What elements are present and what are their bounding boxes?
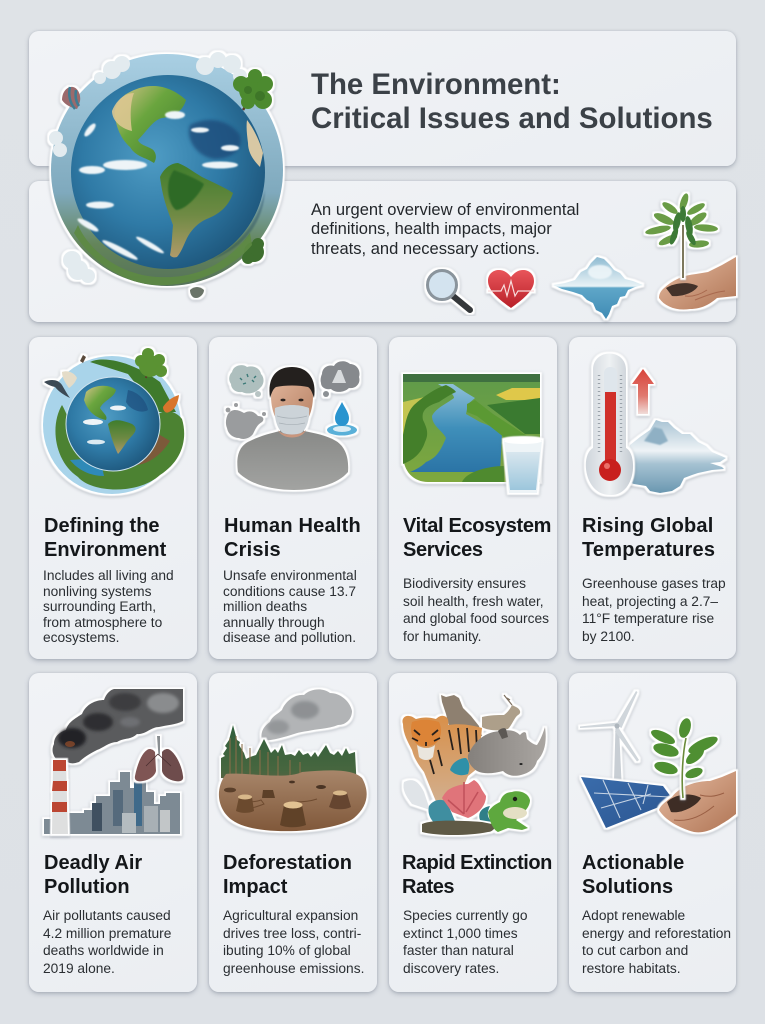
illustration: hero globe	[45, 50, 287, 303]
panel: defining the environment	[29, 337, 197, 659]
heading: Solutions	[582, 876, 673, 898]
heading: Rates	[402, 876, 454, 898]
panel: overview	[29, 181, 736, 322]
illustration: cleared forest	[215, 688, 370, 836]
icon: heart with pulse	[488, 270, 534, 308]
white coral	[403, 780, 430, 810]
heading	[582, 515, 715, 561]
stumps	[224, 781, 351, 827]
rhino	[468, 727, 546, 776]
illustration: smokestack, lungs, city	[40, 688, 187, 840]
body text: Includes all living and	[43, 568, 174, 583]
illustration: masked person	[222, 360, 364, 495]
panel: deforestation impact	[209, 673, 377, 992]
heading: Pollution	[44, 876, 130, 898]
body text: conditions cause 13.7	[223, 584, 356, 598]
heading: Services	[403, 539, 483, 561]
body text: from atmosphere to	[43, 614, 162, 630]
body text: by 2100.	[582, 628, 635, 644]
pollutant cloud: particles	[229, 365, 264, 397]
heading	[402, 852, 552, 898]
heading: Impact	[223, 876, 287, 898]
globe backing with clouds, trees and balloon	[49, 52, 283, 298]
smoke blob	[226, 403, 266, 439]
body text: annually through	[223, 614, 325, 630]
body text: nonliving systems	[43, 584, 152, 598]
water glass	[504, 438, 542, 493]
heading	[224, 515, 361, 561]
iceberg	[622, 420, 726, 493]
panel: title header	[29, 31, 736, 166]
heading: Human Health	[224, 515, 361, 537]
body text: deaths worldwide in	[43, 943, 164, 958]
illustration: earth with nature	[39, 346, 188, 499]
top animal	[441, 695, 482, 738]
sapling	[649, 717, 720, 798]
body text	[403, 576, 549, 644]
smoke plume	[53, 689, 183, 763]
overview text	[311, 200, 579, 258]
body text: 2019 alone.	[43, 960, 115, 976]
body text: Air pollutants caused	[43, 908, 171, 923]
panel: rapid extinction rates	[389, 673, 557, 992]
body text: disease and pollution.	[223, 630, 356, 645]
body text	[403, 908, 528, 976]
city skyline	[44, 768, 180, 834]
body text: and global food sources	[403, 611, 549, 626]
body text: Species currently go	[403, 908, 528, 923]
heading: Actionable	[582, 852, 684, 874]
body text	[582, 576, 726, 644]
icon: iceberg	[553, 257, 643, 319]
body text: 4.2 million premature	[43, 926, 171, 940]
overview icons	[422, 192, 740, 323]
forest and ground	[219, 725, 367, 831]
illustration: thermometer, arrow, iceberg	[582, 352, 730, 500]
body text: greenhouse emissions.	[223, 960, 364, 976]
heading: Rapid Extinction	[402, 852, 552, 874]
frog	[488, 791, 530, 832]
body text: ecosystems.	[43, 630, 119, 645]
wind turbine	[580, 691, 639, 781]
river landscape	[403, 374, 540, 482]
solar panel	[581, 777, 674, 828]
panel: deadly air pollution	[29, 673, 197, 992]
illustration: river and water glass	[400, 372, 546, 498]
body text: discovery rates.	[403, 960, 499, 976]
person	[237, 367, 348, 490]
body text	[43, 908, 171, 976]
smoke	[261, 689, 352, 740]
heading: Environment	[44, 539, 166, 561]
body text: ibuting 10% of global	[223, 943, 351, 958]
body text: surrounding Earth,	[43, 599, 156, 614]
body text: extinct 1,000 times	[403, 926, 518, 940]
icon: magnifying glass	[428, 270, 470, 310]
body text: Unsafe environmental	[223, 568, 357, 583]
panel: human health crisis	[209, 337, 377, 659]
heading: Deforestation	[223, 852, 352, 874]
illustration: turbine, solar, plant in hands	[576, 690, 740, 837]
title: Critical Issues and Solutions	[311, 102, 713, 135]
heading: Rising Global	[582, 515, 714, 537]
tiger	[402, 716, 482, 806]
body text: 11°F temperature rise	[582, 611, 714, 626]
earth sphere	[66, 377, 160, 471]
pollutant cloud: factory	[321, 361, 360, 397]
body text: energy and reforestation	[582, 926, 731, 940]
heading: Defining the	[44, 515, 160, 537]
body text: Adopt renewable	[582, 908, 685, 923]
title: The Environment:	[311, 68, 561, 101]
heading: Crisis	[224, 539, 281, 561]
heading: Temperatures	[582, 539, 715, 561]
heading	[223, 852, 352, 898]
body text: restore habitats.	[582, 960, 681, 976]
earth sphere	[71, 75, 265, 285]
body text: soil health, fresh water,	[403, 594, 544, 608]
body text: heat, projecting a 2.7–	[582, 594, 718, 608]
heading: Deadly Air	[44, 852, 142, 874]
title	[311, 68, 713, 135]
heading	[44, 515, 166, 561]
body text	[223, 908, 364, 976]
smokestack	[52, 760, 68, 834]
panel: rising global temperatures	[569, 337, 736, 659]
body text: Biodiversity ensures	[403, 576, 526, 591]
thermometer	[586, 354, 633, 495]
panel: vital ecosystem services	[389, 337, 557, 659]
nature ring	[43, 348, 184, 494]
body text	[223, 568, 357, 645]
heading	[403, 515, 551, 561]
icon: plant in hands	[645, 192, 736, 310]
panel: actionable solutions	[569, 673, 736, 992]
deer	[482, 705, 520, 730]
water droplet	[327, 402, 357, 436]
overview text: An urgent overview of environmental	[311, 200, 579, 219]
heading	[44, 852, 142, 898]
illustration: endangered animals	[398, 693, 550, 840]
hands with soil	[659, 771, 736, 832]
body text: for humanity.	[403, 628, 481, 644]
soil	[667, 793, 724, 820]
body text	[582, 908, 731, 976]
heading: Vital Ecosystem	[403, 515, 551, 537]
lungs	[135, 736, 183, 781]
overview text: definitions, health impacts, major	[311, 219, 552, 238]
heading	[582, 852, 684, 898]
body text: to cut carbon and	[582, 943, 688, 958]
overview text: threats, and necessary actions.	[311, 239, 540, 258]
body text: drives tree loss, contri-	[223, 926, 361, 940]
teal coral	[428, 800, 457, 826]
body text	[43, 568, 174, 645]
body text: million deaths	[223, 599, 307, 614]
up arrow	[632, 369, 654, 414]
body text: faster than natural	[403, 943, 514, 958]
body text: Agricultural expansion	[223, 908, 358, 923]
body text: Greenhouse gases trap	[582, 576, 726, 591]
